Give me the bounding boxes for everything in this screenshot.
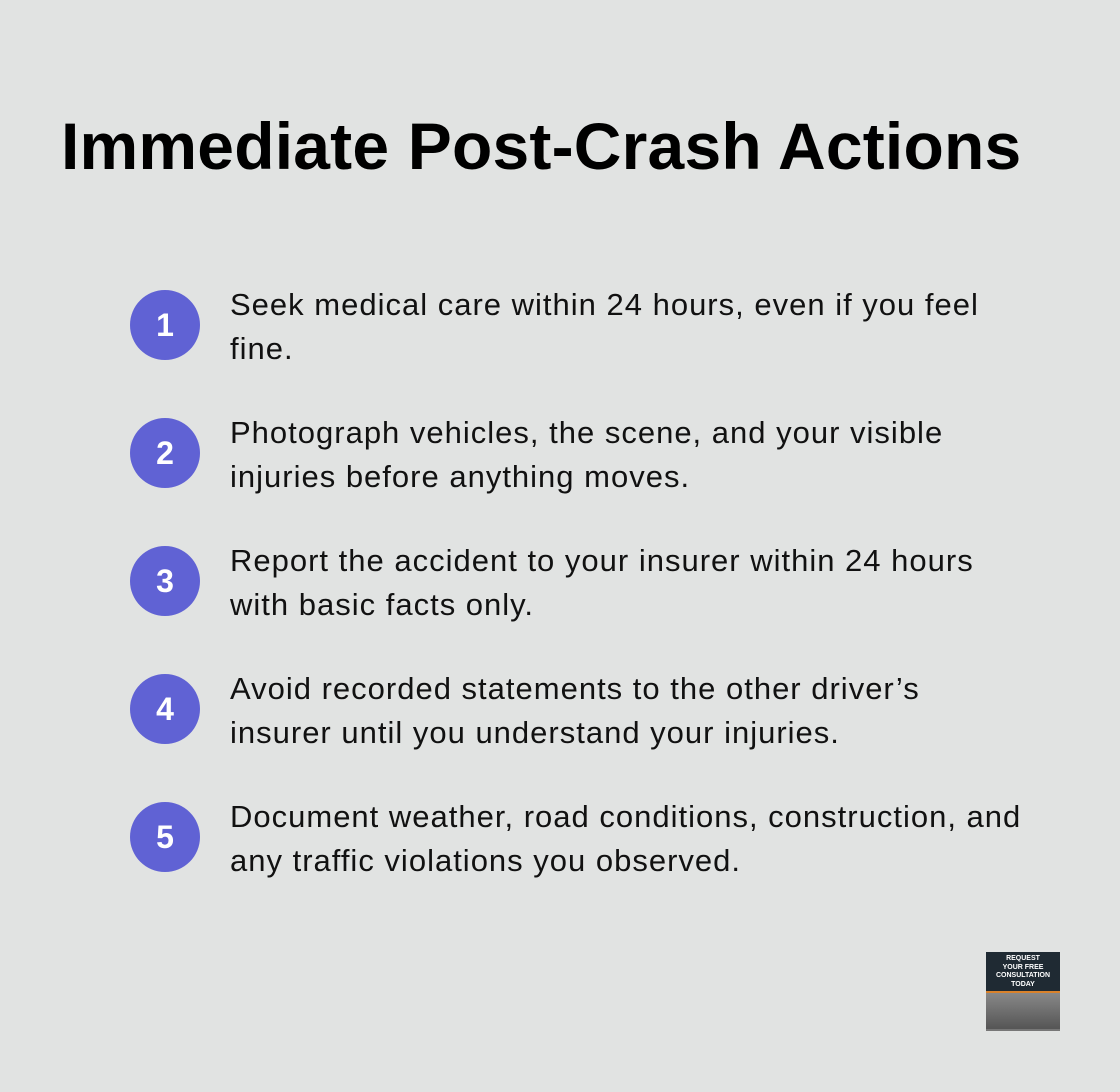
item 1: fine. <box>230 331 294 366</box>
item 4: insurer until you understand your injuries. <box>230 715 840 750</box>
consultation badge: CONSULTATION <box>996 972 1050 979</box>
item 5: Document weather, road conditions, construction, and <box>230 799 1021 834</box>
consultation badge <box>986 952 1060 1031</box>
title: Immediate Post-Crash Actions <box>61 109 1021 183</box>
item 2: Photograph vehicles, the scene, and your visible <box>230 415 943 450</box>
consultation badge: TODAY <box>1011 980 1035 988</box>
item 5: 5 <box>156 819 174 855</box>
item 2: injuries before anything moves. <box>230 459 690 494</box>
item 2: 2 <box>156 435 174 471</box>
item 1: Seek medical care within 24 hours, even if you feel <box>230 287 979 322</box>
consultation badge: REQUEST <box>1006 955 1040 962</box>
consultation badge: YOUR FREE <box>1003 964 1043 970</box>
item 3 <box>130 543 974 622</box>
item 2 <box>130 415 943 494</box>
item 5 <box>130 799 1021 878</box>
item 3: with basic facts only. <box>230 587 534 622</box>
item 3: Report the accident to your insurer within 24 hours <box>230 543 974 578</box>
item 1 <box>130 287 979 366</box>
item 4: Avoid recorded statements to the other driver’s <box>230 671 920 706</box>
item 1: 1 <box>156 307 174 343</box>
item 4 <box>130 671 920 750</box>
item 5: any traffic violations you observed. <box>230 843 741 878</box>
item 4: 4 <box>156 691 174 727</box>
item 3: 3 <box>156 563 174 599</box>
